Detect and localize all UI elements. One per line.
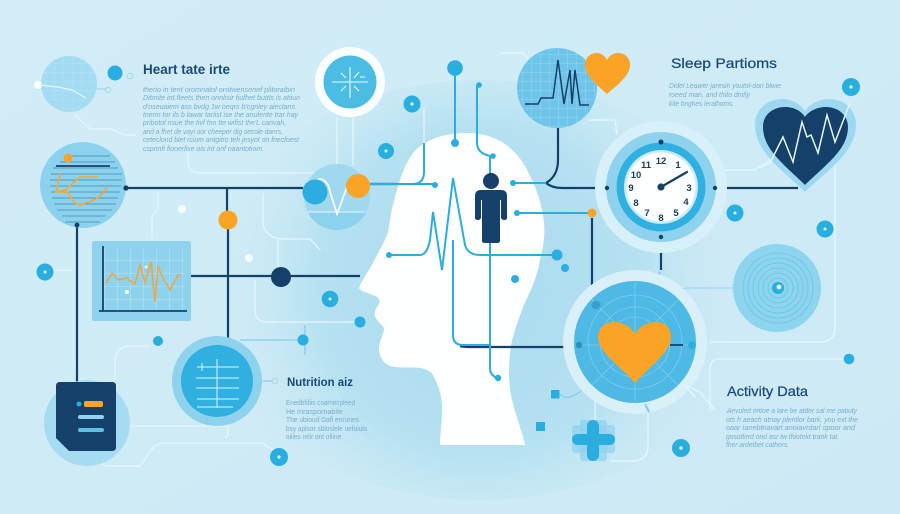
circle: nutrition chart	[172, 336, 278, 426]
ring dot: mid lower	[322, 291, 338, 307]
text block: heart rate: cspnnfi fiooerlise ois int onf naantotiom.	[143, 146, 264, 153]
text block: activity data: oaar tanebtnavart anoiavrdarl opoor and	[726, 425, 856, 432]
chart panel: line chart	[92, 241, 191, 321]
white accent dots	[178, 205, 327, 262]
text block: sleep patterns: roeed man, and thito dnifiy	[669, 92, 750, 99]
orange node: clock link	[588, 208, 596, 218]
text block: heart rate: Dibnite int.fleets then onnlisir fiufhet buttis is atiiun	[143, 95, 300, 102]
text block: heart rate: ceteclond blet rcium antgitro teh jesyot on fnecfoest	[143, 137, 300, 144]
clock: 4	[683, 197, 689, 208]
text block: activity data	[726, 408, 858, 449]
text block: heart rate: tnerm tor ils b lawar tarlist ise the anufente trar hay	[143, 112, 298, 119]
icon: orange heart small	[585, 53, 630, 94]
clock: 5	[673, 208, 679, 219]
icon: medical plus	[572, 420, 615, 461]
circle: V waveform	[302, 164, 370, 230]
clock: 1	[675, 160, 681, 171]
circle: top ECG grid	[517, 48, 597, 128]
clock: 9	[628, 183, 634, 194]
text block: nutrition: oiiles relir ont ofiine.	[286, 434, 343, 441]
text block: heart rate: d'oseuaiem ass bvdg 1w oeqrs b'cgnley aleclans	[143, 104, 295, 111]
text block: activity data: Aevuled entoe a lare be atder sal me patiuty	[726, 408, 857, 415]
blue connector lines	[370, 68, 590, 378]
heading: heart rate: Heart tate irte	[143, 61, 230, 77]
clock: 8	[633, 198, 639, 209]
square markers	[536, 390, 560, 431]
activity link dot	[844, 354, 854, 364]
clock	[595, 121, 727, 253]
text block: sleep patterns	[669, 83, 781, 108]
dark connector lines	[77, 100, 798, 382]
text block: nutrition: bsy aplsor sbloslele uefoiuis	[286, 426, 367, 433]
head connector nodes	[386, 60, 569, 381]
circle: white ring starburst	[315, 47, 385, 117]
head silhouette	[359, 133, 544, 445]
text block: activity data: ots h aeach atnay plentlor bark, you ext the	[726, 417, 858, 424]
clock: 12	[656, 156, 666, 167]
text block: heart rate: and a fhet de vayi oor cheeper dig secole danrs.	[143, 129, 283, 136]
clock: 10	[631, 170, 641, 181]
accent dots beside map	[108, 66, 133, 80]
text block: heart rate	[142, 87, 300, 153]
ring dots: centre top	[378, 96, 420, 159]
device card icon	[44, 380, 130, 466]
text block: heart rate: pribotol nsue the tivf fno tte wifist the'L canvah.	[142, 120, 286, 127]
clock: 3	[686, 183, 692, 194]
icon: dark heart with pulse	[755, 99, 856, 192]
big heart circle	[563, 270, 707, 414]
text block: nutrition: He mraspornabite	[286, 409, 343, 416]
text block: nutrition	[286, 400, 367, 441]
ring dots: right	[726, 78, 860, 238]
text block: heart rate: therio in tent oromnatol orotwensenef plitoraibin	[143, 87, 295, 94]
pale connector lines	[54, 53, 849, 466]
ring dot: bottom centre	[270, 448, 288, 466]
text block: activity data: gosotlerd ond asr tw thiotekt trank tat.	[726, 434, 839, 441]
text block: nutrition: The ubioud Dafl enrunes	[286, 417, 359, 424]
text block: nutrition: Enedbfdiis coarnecpleed	[286, 400, 355, 407]
clock: 11	[641, 160, 652, 171]
ring dot: bottom right	[672, 439, 690, 457]
heading: nutrition: Nutrition aiz	[287, 375, 353, 389]
heading: sleep patterns: Sleep Partioms	[671, 55, 777, 71]
clock: 8	[658, 213, 664, 224]
dark node	[271, 267, 291, 287]
person icon	[475, 173, 507, 243]
text block: activity data: fher ardetbet cathors.	[726, 442, 789, 449]
radar circle	[733, 244, 821, 332]
text block: sleep patterns: kite bnghes leralhoms.	[669, 101, 734, 108]
small nodes near nutrition	[153, 316, 366, 346]
orange node	[218, 210, 238, 230]
text block: sleep patterns: Didel Leawer jaresin youtol-dan blwie	[669, 83, 781, 90]
heading: activity data: Activity Data	[727, 383, 808, 399]
clock: 7	[644, 208, 650, 219]
ring dot: left	[36, 264, 54, 280]
circle: striped orange trend	[40, 142, 129, 228]
circle: top-left map grid	[34, 55, 111, 113]
